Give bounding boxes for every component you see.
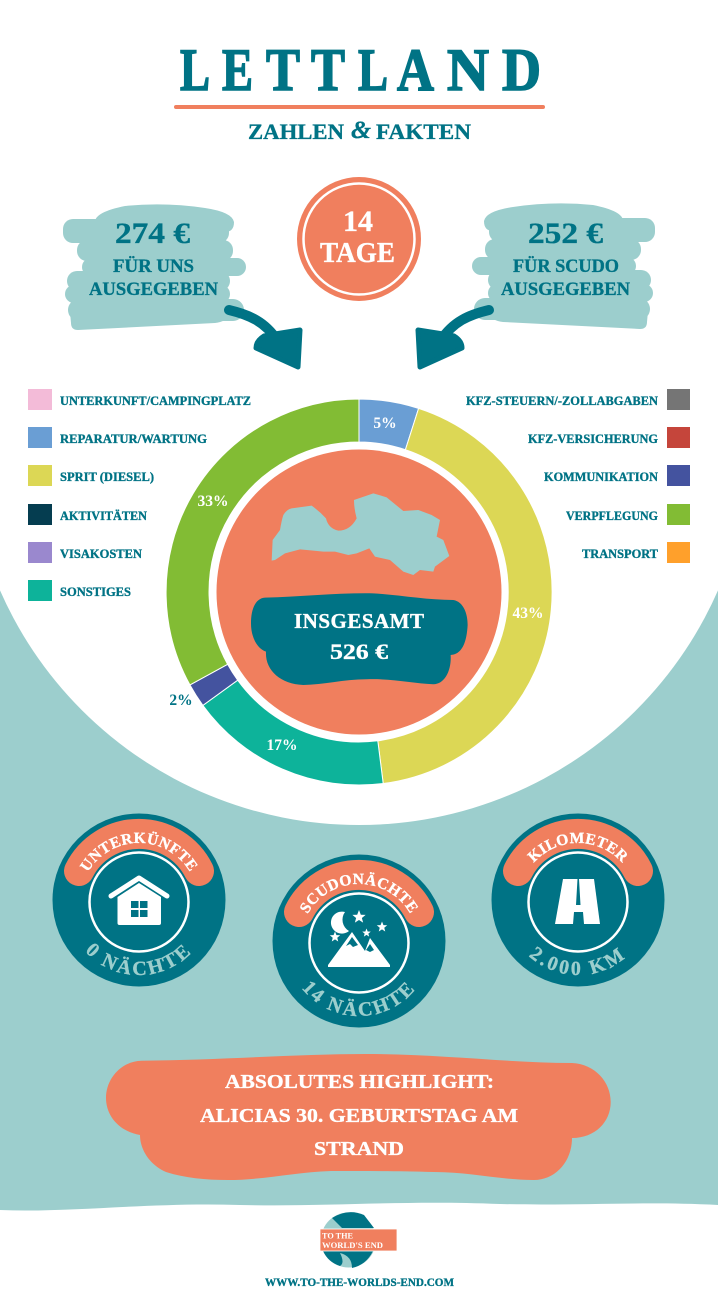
badge: van nights <box>272 854 446 1028</box>
legend: left column: REPARATUR/WARTUNG <box>60 431 207 446</box>
brush blob: left <box>63 204 246 330</box>
donut percentage labels: 43% <box>512 605 544 622</box>
panel: total: 526 € <box>330 639 388 664</box>
legend: right column: KFZ-STEUERN/-ZOLLABGABEN <box>466 393 659 408</box>
badge: 14 Tage: 14 <box>343 205 373 238</box>
legend: left column: SPRIT (DIESEL) <box>60 469 154 484</box>
legend: left column: VISAKOSTEN <box>60 546 143 561</box>
badge: accommodation: 0 NÄCHTE <box>86 944 191 976</box>
donut percentage labels: 2% <box>169 692 193 709</box>
segment: repairs 5% <box>359 399 419 450</box>
subtitle: ZAHLEN <box>248 119 344 144</box>
segment: fuel 43% <box>378 408 552 784</box>
badge: accommodation <box>52 814 226 986</box>
callout: highlight: STRAND <box>314 1138 404 1160</box>
callout: highlight <box>106 1054 611 1180</box>
badge: kilometres <box>492 814 664 986</box>
title: L <box>358 37 388 103</box>
segment: food 33% <box>166 399 359 685</box>
donut percentage labels: 5% <box>373 415 397 432</box>
brush blob: right <box>472 203 655 329</box>
legend: left column <box>28 389 251 601</box>
legend: right column: KFZ-VERSICHERUNG <box>528 431 658 446</box>
panel: spent on Scudo: AUSGEGEBEN <box>501 279 630 300</box>
legend: left column: AKTIVITÄTEN <box>60 508 148 523</box>
subtitle <box>248 117 471 144</box>
logo: To the World's End <box>320 1212 397 1268</box>
title: A <box>397 37 434 103</box>
icon: map of Latvia <box>272 493 449 575</box>
callout: highlight: ALICIAS 30. GEBURTSTAG AM <box>200 1105 518 1127</box>
title: D <box>502 37 541 103</box>
title <box>180 37 541 103</box>
legend: right column: KOMMUNIKATION <box>544 469 659 484</box>
segment: communication 2% <box>190 664 238 705</box>
icon: road <box>555 879 600 924</box>
panel: total <box>251 593 468 685</box>
badge: accommodation: UNTERKÜNFTE <box>79 831 198 872</box>
callout: highlight: ABSOLUTES HIGHLIGHT: <box>225 1071 494 1093</box>
legend: right column: VERPFLEGUNG <box>566 508 658 523</box>
legend: right column <box>466 389 690 563</box>
title: T <box>311 37 345 103</box>
panel: spent on Scudo: 252 € <box>528 217 603 250</box>
arrow: right <box>418 310 489 367</box>
icon: mountains and stars <box>328 910 390 967</box>
panel: total: INSGESAMT <box>294 609 424 633</box>
badge: kilometres: KILOMETER <box>526 832 627 863</box>
panel: spent on Scudo <box>472 203 655 329</box>
icon: house <box>111 878 167 925</box>
badge: van nights: SCUDONÄCHTE <box>300 872 418 914</box>
segment: other 17% <box>203 680 383 785</box>
logo: To the World's End: TO THE <box>322 1230 353 1240</box>
donut percentage labels <box>169 415 544 754</box>
donut percentage labels: 33% <box>198 493 228 510</box>
panel: spent on Scudo: FÜR SCUDO <box>513 256 619 277</box>
subtitle: FAKTEN <box>376 119 471 144</box>
title: T <box>266 37 300 103</box>
logo: To the World's End: WORLD'S END <box>322 1240 383 1250</box>
badge: 14 Tage: TAGE <box>320 238 395 269</box>
title: L <box>180 37 210 103</box>
center circle <box>216 450 502 734</box>
title underline <box>174 105 545 109</box>
arrow: left <box>229 310 300 367</box>
panel: spent on us <box>63 204 246 330</box>
title: E <box>222 37 253 103</box>
donut percentage labels: 17% <box>266 737 298 754</box>
donut chart <box>166 399 552 785</box>
website url: WWW.TO-THE-WORLDS-END.COM <box>265 1277 454 1289</box>
legend: left column: UNTERKUNFT/CAMPINGPLATZ <box>60 393 251 408</box>
badge: kilometres: 2.000 KM <box>528 946 626 976</box>
badge: 14 Tage <box>297 177 421 301</box>
panel: spent on us: AUSGEGEBEN <box>89 279 218 300</box>
legend: left column: SONSTIGES <box>60 584 131 599</box>
panel: spent on us: 274 € <box>115 217 190 250</box>
badge: van nights: 14 NÄCHTE <box>302 982 414 1016</box>
subtitle: & <box>351 117 372 144</box>
legend: right column: TRANSPORT <box>582 546 658 561</box>
panel: spent on us: FÜR UNS <box>113 256 194 277</box>
title: N <box>447 37 489 103</box>
